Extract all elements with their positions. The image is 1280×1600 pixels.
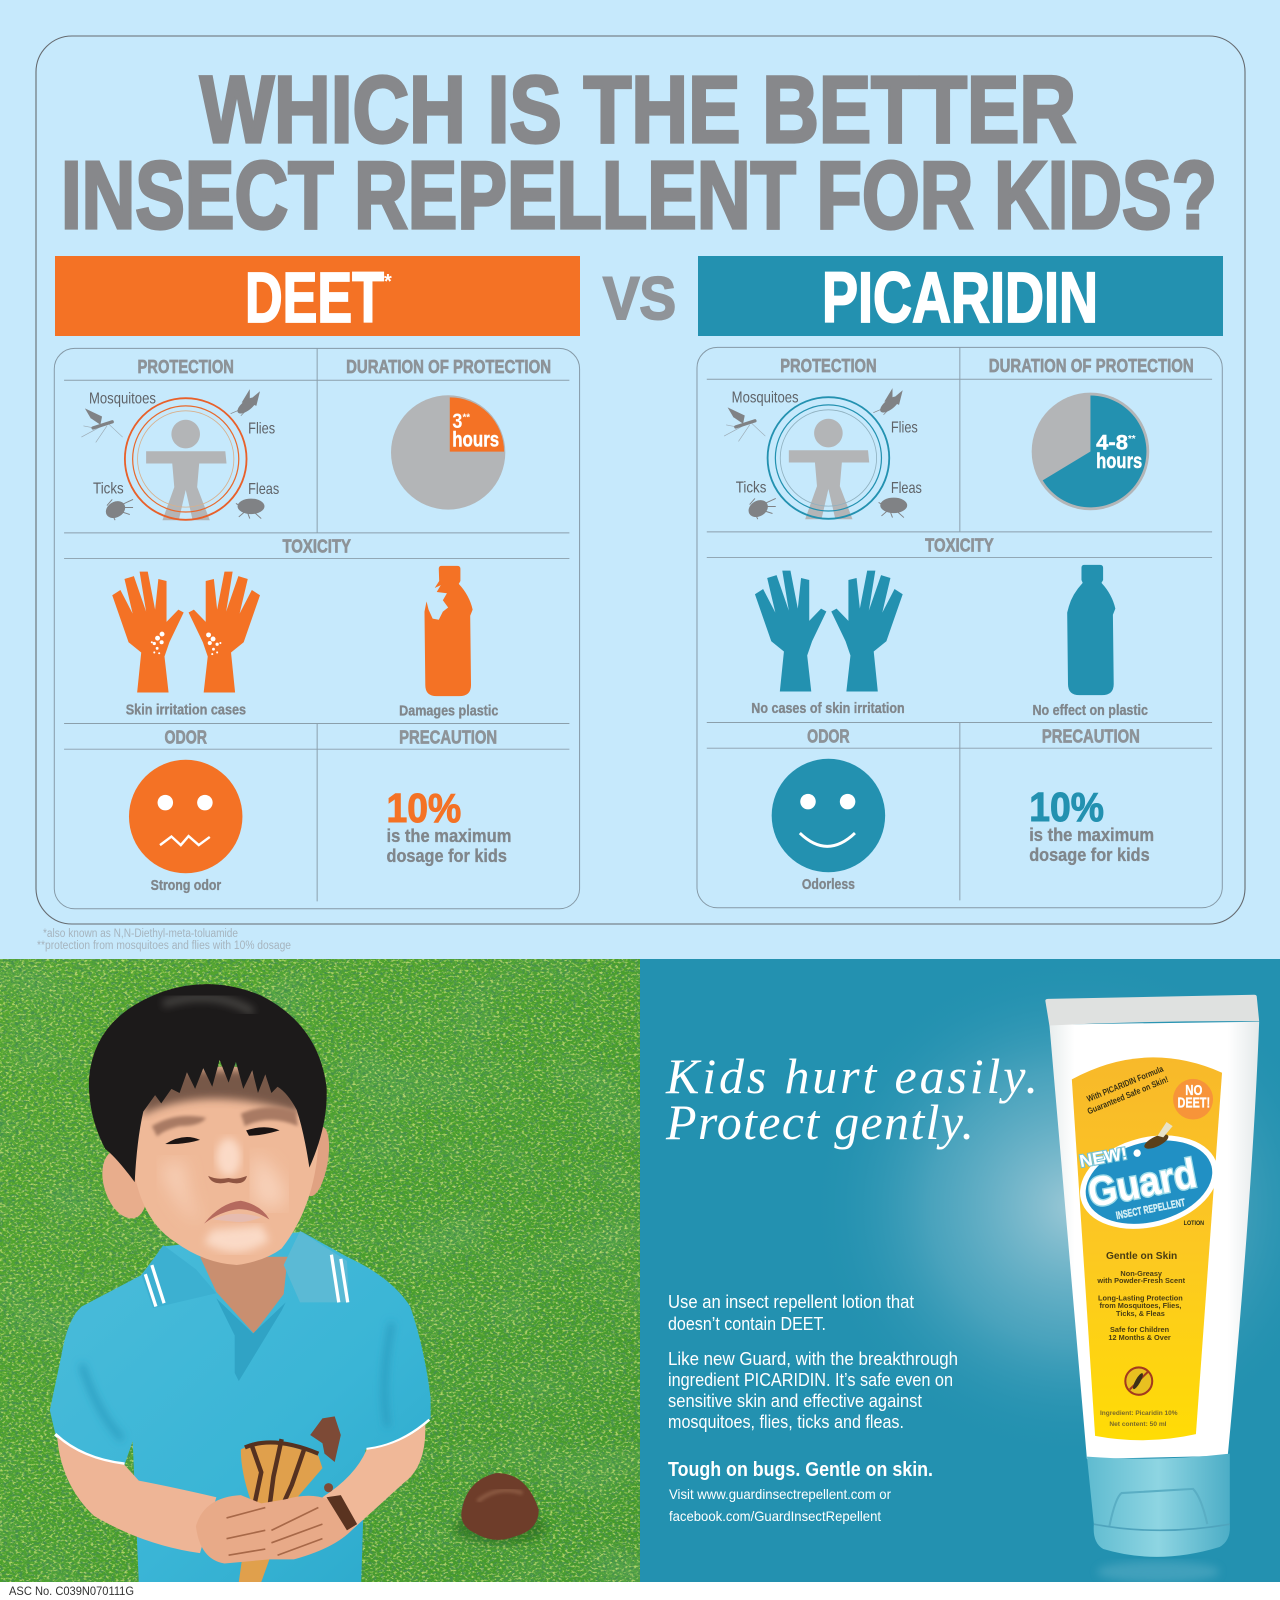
- text: body copy: mosquitoes, flies, ticks and fleas.: [668, 1411, 904, 1432]
- text: body copy: [668, 1291, 958, 1432]
- icon: fly: [231, 389, 260, 416]
- icon: tick: [745, 497, 776, 520]
- logo: Guard: Guard: [1084, 1150, 1200, 1216]
- icon: intact bottle: [1067, 565, 1115, 695]
- heading: duration of protection: DURATION OF PROTECTION: [989, 355, 1194, 376]
- label: benefits: with Powder-Fresh Scent: [1096, 1276, 1186, 1285]
- label: mosquitoes: Mosquitoes: [732, 389, 799, 406]
- shirt: [50, 1232, 431, 1582]
- label: mosquitoes: Mosquitoes: [89, 390, 156, 407]
- caption: skin irritation cases: Skin irritation cases: [126, 702, 246, 718]
- fallen ice cream: [461, 1473, 539, 1540]
- DEET banner: DEET: [245, 259, 384, 338]
- title: WHICH IS THE BETTER: [200, 57, 1076, 163]
- DEET banner: [55, 256, 580, 338]
- label: ticks: Ticks: [93, 480, 124, 497]
- label: formula claim: With PICARIDIN Formula: [1085, 1063, 1165, 1104]
- bottom strip: [0, 1582, 1280, 1600]
- title: [61, 57, 1217, 249]
- face: [131, 1066, 319, 1265]
- caption: damages plastic: Damages plastic: [399, 704, 498, 720]
- PICARIDIN banner: [698, 256, 1223, 338]
- ears: [94, 1144, 155, 1224]
- tube reflection: [1097, 1561, 1220, 1583]
- panel: product ad background: [640, 959, 1280, 1582]
- heading: odor: ODOR: [164, 726, 207, 747]
- placket: [216, 1298, 286, 1381]
- collar left: [142, 1245, 216, 1308]
- icon: healthy hands: [755, 571, 903, 691]
- icon: irritated hands: [112, 572, 260, 692]
- stat: 10 percent: 10%: [387, 785, 461, 831]
- pie chart: 3 hours: 3: [452, 410, 463, 433]
- PICARIDIN banner: PICARIDIN: [822, 259, 1098, 338]
- outer rounded panel: [36, 36, 1245, 924]
- label: benefits: Long-Lasting Protection: [1098, 1293, 1183, 1302]
- icon: damaged bottle: [424, 566, 473, 696]
- heading: toxicity: TOXICITY: [282, 535, 351, 556]
- tube label: [1072, 1057, 1222, 1440]
- cone: [239, 1444, 322, 1582]
- left arm: [57, 1437, 216, 1553]
- text: website links: [669, 1486, 891, 1524]
- text: body copy: Like new Guard, with the breakthrough: [668, 1348, 958, 1369]
- DEET banner: *: [384, 271, 392, 293]
- icon: fly: [873, 388, 903, 415]
- collar right: [284, 1231, 349, 1302]
- icon: happy face: [772, 759, 885, 872]
- footnotes: [37, 928, 291, 952]
- text: maximum dosage: is the maximum: [1029, 824, 1154, 845]
- label: benefits: Non-Greasy: [1120, 1269, 1163, 1278]
- forehead shade: [141, 1070, 300, 1116]
- label: formula claim: Guaranteed Safe on Skin!: [1086, 1074, 1170, 1116]
- heading: precaution: PRECAUTION: [1042, 725, 1140, 746]
- heading: protection: PROTECTION: [780, 355, 877, 376]
- pie chart: 4-8 hours: 4-8: [1096, 431, 1128, 454]
- tube crimp: [1045, 995, 1259, 1025]
- panel: grass photo with boy: [0, 959, 640, 1582]
- caption: odorless: Odorless: [802, 877, 855, 893]
- tagline: Tough on bugs. Gentle on skin.: [668, 1459, 933, 1481]
- right arm: [322, 1425, 425, 1535]
- icon: mosquito: [724, 407, 765, 441]
- tube body: [1049, 1022, 1259, 1459]
- nose: [216, 1138, 241, 1176]
- stat: 10 percent: 10%: [1029, 784, 1104, 830]
- heading: odor: ODOR: [807, 725, 850, 746]
- text: maximum dosage: [387, 825, 511, 866]
- panel: DEET comparison: [54, 348, 580, 909]
- icon: protected person with rings: [768, 397, 889, 519]
- heading: precaution: PRECAUTION: [399, 726, 497, 747]
- logo: Guard: NEW!: [1078, 1143, 1129, 1171]
- vs label: VS: [603, 265, 676, 332]
- panel: PICARIDIN comparison: [697, 347, 1222, 908]
- icon: mosquito: [82, 408, 122, 442]
- label: fleas: Fleas: [891, 480, 922, 497]
- pie chart: 3 hours: hours: [452, 428, 499, 451]
- label: benefits: Ticks, & Fleas: [1116, 1309, 1165, 1318]
- label: benefits: Gentle on Skin: [1106, 1251, 1177, 1262]
- label: lotion: LOTION: [1184, 1220, 1205, 1227]
- icon: flea: [879, 498, 907, 518]
- brows: [152, 1116, 206, 1137]
- text: body copy: ingredient PICARIDIN. It’s safe even on: [668, 1369, 953, 1390]
- seal: no deet: [1173, 1079, 1213, 1120]
- heading: duration of protection: DURATION OF PROTECTION: [346, 356, 551, 377]
- melted chocolate: [310, 1416, 341, 1462]
- heading: protection: PROTECTION: [138, 356, 234, 377]
- mouth: [204, 1201, 269, 1224]
- pie chart: 3 hours: [391, 395, 505, 510]
- icon: no mosquito badge: [1125, 1367, 1152, 1395]
- eyes: [165, 1137, 200, 1144]
- headline: script: Protect gently.: [665, 1094, 974, 1150]
- logo: Guard: INSECT REPELLENT: [1115, 1197, 1186, 1222]
- label: ingredient: Ingredient: Picaridin 10%: [1100, 1410, 1178, 1417]
- label: fleas: Fleas: [248, 481, 279, 498]
- shadow on grass: [453, 1512, 547, 1545]
- label: benefits: Safe for Children: [1110, 1325, 1170, 1334]
- label: benefits: from Mosquitoes, Flies,: [1099, 1301, 1181, 1310]
- pie chart: 4-8 hours: [1032, 393, 1149, 510]
- pie chart: 3 hours: **: [462, 413, 470, 424]
- seal: no deet: NO: [1185, 1083, 1202, 1099]
- label: ingredient: Net content: 50 ml: [1109, 1421, 1167, 1428]
- text: maximum dosage: dosage for kids: [1029, 844, 1150, 865]
- text: maximum dosage: is the maximum: [387, 825, 511, 846]
- logo: Guard: [1070, 1121, 1228, 1243]
- text: maximum dosage: dosage for kids: [387, 845, 507, 866]
- text: body copy: Use an insect repellent lotion that: [668, 1291, 914, 1312]
- label: ticks: Ticks: [736, 479, 767, 496]
- hands: [196, 1495, 355, 1564]
- ASC number: ASC No. C039N070111G: [9, 1584, 134, 1598]
- caption: strong odor: Strong odor: [151, 878, 221, 894]
- pie chart: 4-8 hours: **: [1128, 434, 1136, 445]
- pie chart: 4-8 hours: hours: [1096, 450, 1142, 473]
- text: website links: facebook.com/GuardInsectRepellent: [669, 1508, 881, 1524]
- icon: flea: [236, 499, 264, 519]
- label: benefits: 12 Months & Over: [1108, 1333, 1171, 1342]
- icon: protected person with rings: [125, 398, 247, 520]
- footnotes: *also known as N,N-Diethyl-meta-toluamide: [43, 928, 238, 940]
- text: body copy: sensitive skin and effective against: [668, 1390, 922, 1411]
- neck: [200, 1257, 288, 1333]
- seal: no deet: DEET!: [1178, 1095, 1210, 1112]
- icon: tick: [103, 498, 133, 521]
- label: benefits: [1096, 1251, 1186, 1342]
- icon: unhappy face: [129, 760, 242, 873]
- headline: script: [665, 1048, 1038, 1150]
- text: website links: Visit www.guardinsectrepellent.com or: [669, 1486, 891, 1502]
- label: ingredient: [1100, 1410, 1178, 1428]
- glow behind tube: [866, 1011, 1280, 1404]
- heading: toxicity: TOXICITY: [925, 534, 994, 555]
- caption: no effect on plastic: No effect on plastic: [1032, 703, 1148, 719]
- caption: no cases of skin irritation: No cases of skin irritation: [751, 701, 905, 717]
- product: Guard tube: [1045, 995, 1259, 1583]
- label: flies: Flies: [891, 419, 918, 436]
- tube cap: [1087, 1454, 1230, 1557]
- footnotes: **protection from mosquitoes and flies with 10% dosage: [37, 940, 291, 952]
- text: maximum dosage: [1029, 824, 1154, 865]
- illustration: crying boy: [50, 984, 547, 1582]
- hair: [89, 984, 327, 1182]
- label: flies: Flies: [248, 420, 275, 437]
- headline: script: Kids hurt easily.: [665, 1048, 1038, 1104]
- text: body copy: doesn’t contain DEET.: [668, 1313, 826, 1334]
